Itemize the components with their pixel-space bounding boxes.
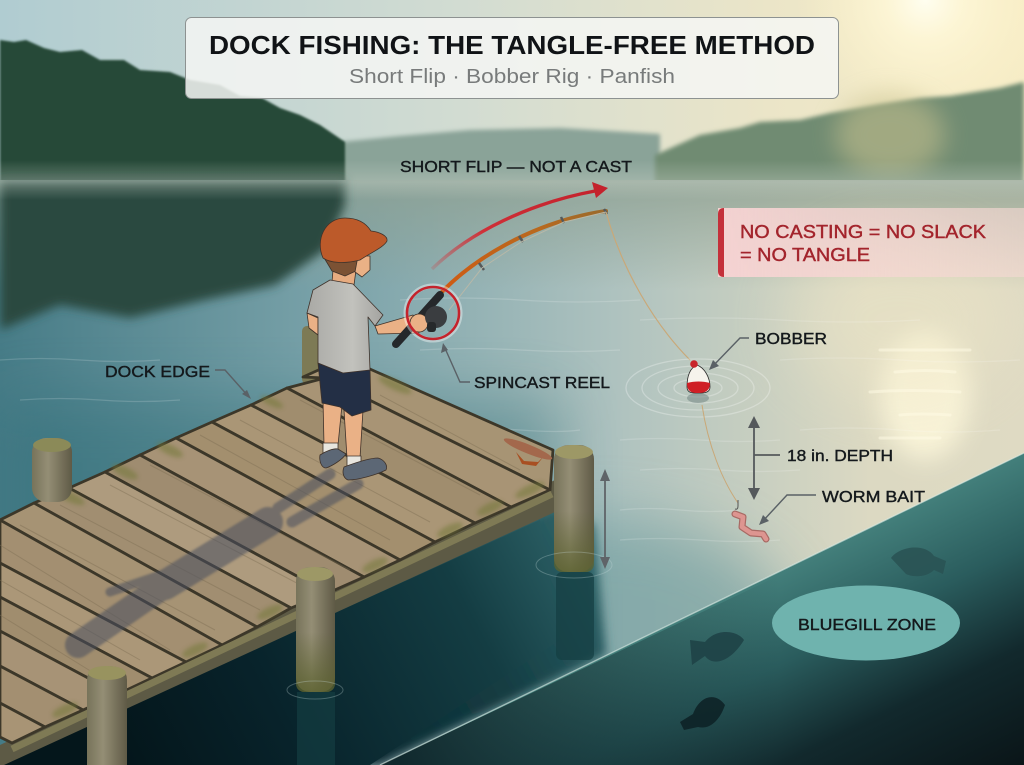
water ripples around bobber: [626, 359, 770, 417]
rod blank: [440, 211, 606, 294]
callout: no casting: [718, 208, 1024, 277]
short flip arc arrow: [432, 182, 608, 269]
background: lake surface: [0, 160, 1024, 765]
socks and shoes: [320, 443, 387, 480]
dock height arrow: [600, 469, 610, 569]
label: bobber: BOBBER: [755, 331, 827, 348]
dock: [0, 358, 555, 765]
fishing rod: [396, 209, 607, 344]
fish silhouettes: [680, 548, 946, 730]
title panel: [186, 18, 838, 98]
right post: [554, 445, 594, 572]
label: bobber: [709, 331, 827, 370]
fishing line to bobber: [606, 212, 690, 360]
near arm: [375, 315, 419, 334]
far arm: [307, 313, 318, 335]
label: spincast reel: SPINCAST REEL: [474, 375, 610, 392]
middle post: [296, 567, 335, 692]
plank end faces: [12, 494, 552, 749]
neck: [332, 270, 356, 285]
rod guides: [479, 209, 607, 270]
handle: [396, 295, 440, 344]
icon: bobber: [687, 360, 710, 403]
spincast reel: [425, 306, 447, 332]
moss on plank ends: [50, 373, 547, 720]
shirt: [307, 280, 383, 373]
back dock post: [302, 326, 320, 384]
plank deck: [0, 358, 553, 743]
callout accent bar: [718, 208, 724, 277]
label: dock edge: DOCK EDGE: [105, 364, 210, 381]
underwater cutaway: [380, 453, 1024, 765]
left post: [32, 438, 72, 502]
boy figure: [307, 218, 419, 480]
front post: [87, 666, 127, 765]
dock posts: [32, 438, 594, 765]
icon: worm bait: [735, 500, 766, 539]
title: DOCK FISHING: THE TANGLE-FREE METHOD: [209, 30, 815, 60]
cap: [320, 218, 387, 262]
hand: [410, 314, 428, 332]
label: dock edge: [105, 364, 251, 399]
label: worm bait: [759, 489, 925, 525]
depth arrow with label: 18 in. DEPTH: [787, 448, 893, 465]
post water ripples: [287, 552, 612, 699]
icon: dock cleat: [502, 435, 554, 466]
surface line of the cutaway: [380, 453, 1024, 765]
shaded water beneath the dock: [0, 505, 606, 765]
line along the rod: [449, 212, 606, 310]
boy's shadow on deck: [78, 474, 358, 645]
callout text: = NO TANGLE: [740, 245, 870, 265]
hair and ear: [323, 256, 362, 276]
reel highlight circle: [406, 286, 460, 340]
leader line below bobber: [702, 405, 738, 503]
legs: [323, 400, 363, 458]
depth arrow with label: [748, 416, 893, 500]
zone label: BLUEGILL ZONE: [798, 617, 936, 634]
beam under the planks: [0, 480, 555, 765]
label: worm bait: WORM BAIT: [822, 489, 925, 506]
zone ellipse: [772, 586, 960, 660]
label: spincast reel: [441, 343, 610, 392]
background: sky: [0, 0, 1024, 190]
callout text: NO CASTING = NO SLACK: [740, 222, 986, 242]
background: far tree lines: [0, 40, 1024, 185]
post reflections: [297, 572, 594, 765]
label: short flip: SHORT FLIP — NOT A CAST: [400, 159, 632, 176]
subtitle: Short Flip · Bobber Rig · Panfish: [349, 66, 675, 88]
plank grain: [0, 395, 520, 680]
shorts: [318, 363, 371, 416]
